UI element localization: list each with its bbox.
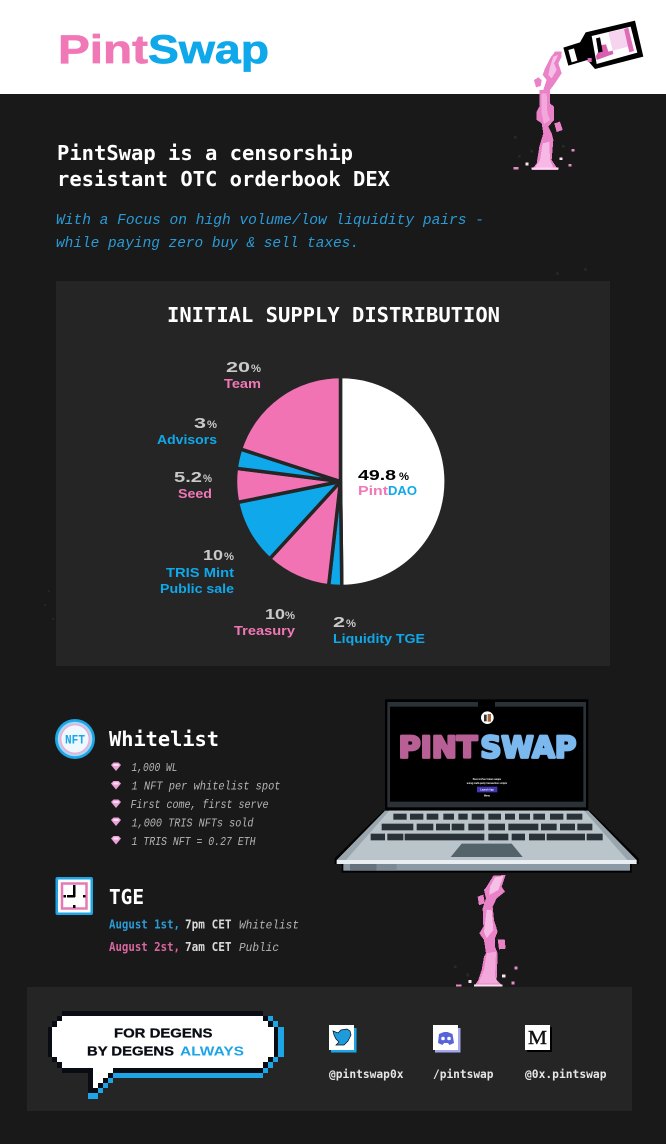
screen wordmark xyxy=(399,731,576,765)
bubble text: BY DEGENS xyxy=(87,1044,174,1058)
label: TRIS Mint Public sale 10%: Public sale xyxy=(160,581,234,596)
whitelist date: August 1st, xyxy=(109,918,180,932)
logo: PintSwap: Pint xyxy=(58,28,148,72)
label: Seed 5.2% xyxy=(174,469,212,501)
icon: NFT badge: NFT xyxy=(65,732,85,748)
social: medium: M xyxy=(528,1027,547,1049)
bullet 1 xyxy=(111,761,178,775)
public date: August 2st, xyxy=(109,940,180,954)
label: TRIS Mint Public sale 10% xyxy=(160,547,235,596)
label: PintDAO 49.8%: % xyxy=(399,471,409,483)
public date xyxy=(109,940,279,955)
bullet 4: 1,000 TRIS NFTs sold xyxy=(132,816,254,830)
panel: footer xyxy=(27,987,632,1111)
header band xyxy=(0,0,666,94)
label: Treasury 10%: 10 xyxy=(265,606,285,623)
label: Seed 5.2%: Seed xyxy=(178,486,212,501)
bullet 1: 1,000 WL xyxy=(132,761,178,775)
icon: NFT badge xyxy=(55,719,95,759)
whitelist bullets xyxy=(111,761,280,849)
label: TRIS Mint Public sale 10%: % xyxy=(224,551,234,563)
label: TRIS Mint Public sale 10%: TRIS Mint xyxy=(166,565,235,580)
social: twitter xyxy=(329,1025,404,1081)
heading xyxy=(57,141,390,191)
screen wordmark: SWAP xyxy=(480,731,576,765)
screen button: Launch App xyxy=(480,788,494,791)
screen tagline xyxy=(467,778,508,785)
screen button xyxy=(477,787,497,792)
public date: 7am CET xyxy=(185,940,232,954)
label: Team 20%: Team xyxy=(224,376,261,391)
label: Liquidity TGE 2%: Liquidity TGE xyxy=(333,631,425,646)
label: TRIS Mint Public sale 10%: 10 xyxy=(203,547,223,564)
subheading: With a Focus on high volume/low liquidity pairs - xyxy=(56,212,484,229)
social: medium xyxy=(525,1025,607,1081)
whitelist date: 7pm CET xyxy=(185,918,232,932)
handle: @0x.pintswap xyxy=(525,1067,607,1081)
label: Advisors 3%: 3 xyxy=(194,415,206,432)
label: Team 20%: 20 xyxy=(226,359,250,376)
label: PintDAO 49.8% xyxy=(358,467,417,498)
illustration: pink liquid stream top xyxy=(513,52,574,170)
label: PintDAO 49.8%: 49.8 xyxy=(358,467,396,484)
icon: tipped bottle pouring xyxy=(563,21,643,69)
public date: Public xyxy=(239,941,279,955)
label: Treasury 10%: % xyxy=(285,610,295,622)
label: Advisors 3%: % xyxy=(207,419,217,431)
pie chart xyxy=(235,376,446,587)
screen tagline: using multi-party transaction scripts xyxy=(467,782,508,785)
heading: PintSwap is a censorship xyxy=(57,141,353,165)
subheading: while paying zero buy & sell taxes. xyxy=(56,235,359,252)
label: Seed 5.2%: % xyxy=(203,473,212,485)
illustration: laptop xyxy=(335,699,639,873)
illustration: pink liquid stream bottom xyxy=(454,875,517,986)
screen wordmark: PINT xyxy=(399,731,477,765)
social: discord xyxy=(433,1025,494,1081)
label: Advisors 3% xyxy=(157,415,217,447)
chart title: INITIAL SUPPLY DISTRIBUTION xyxy=(167,303,500,327)
panel: initial supply distribution xyxy=(56,281,610,666)
label: PintDAO 49.8%: Pint xyxy=(358,483,389,498)
laptop screen logo badge xyxy=(481,711,494,724)
bubble text: FOR DEGENS xyxy=(114,1026,213,1040)
label: Liquidity TGE 2% xyxy=(333,614,425,646)
label: Liquidity TGE 2%: % xyxy=(346,618,356,630)
bubble text: ALWAYS xyxy=(180,1044,244,1058)
label: Liquidity TGE 2%: 2 xyxy=(333,614,345,631)
speech bubble xyxy=(48,1011,284,1099)
label: Seed 5.2%: 5.2 xyxy=(174,469,202,486)
bullet 3: First come, first serve xyxy=(130,798,268,812)
whitelist heading: Whitelist xyxy=(109,727,219,751)
label: Team 20%: % xyxy=(251,363,261,375)
label: Treasury 10%: Treasury xyxy=(234,623,296,638)
screen menu link: Menu xyxy=(484,796,491,798)
label: Team 20% xyxy=(224,359,261,391)
label: Treasury 10% xyxy=(234,606,296,638)
handle: /pintswap xyxy=(433,1067,494,1081)
bullet 5: 1 TRIS NFT = 0.27 ETH xyxy=(132,835,256,849)
heading: resistant OTC orderbook DEX xyxy=(57,167,390,191)
logo: PintSwap xyxy=(58,28,269,72)
screen tagline: Peer-to-Peer token swaps xyxy=(473,778,502,781)
TGE schedule xyxy=(109,918,299,955)
logo: PintSwap: Swap xyxy=(148,28,269,72)
whitelist date xyxy=(109,918,299,932)
handle: @pintswap0x xyxy=(329,1067,404,1081)
bubble text xyxy=(87,1026,244,1058)
TGE heading: TGE xyxy=(109,885,144,909)
label: Advisors 3%: Advisors xyxy=(157,432,217,447)
label: PintDAO 49.8%: DAO xyxy=(388,483,417,498)
icon: clock xyxy=(56,877,93,915)
whitelist date: Whitelist xyxy=(239,918,299,932)
bullet 2: 1 NFT per whitelist spot xyxy=(132,780,280,794)
subheading xyxy=(56,212,484,252)
